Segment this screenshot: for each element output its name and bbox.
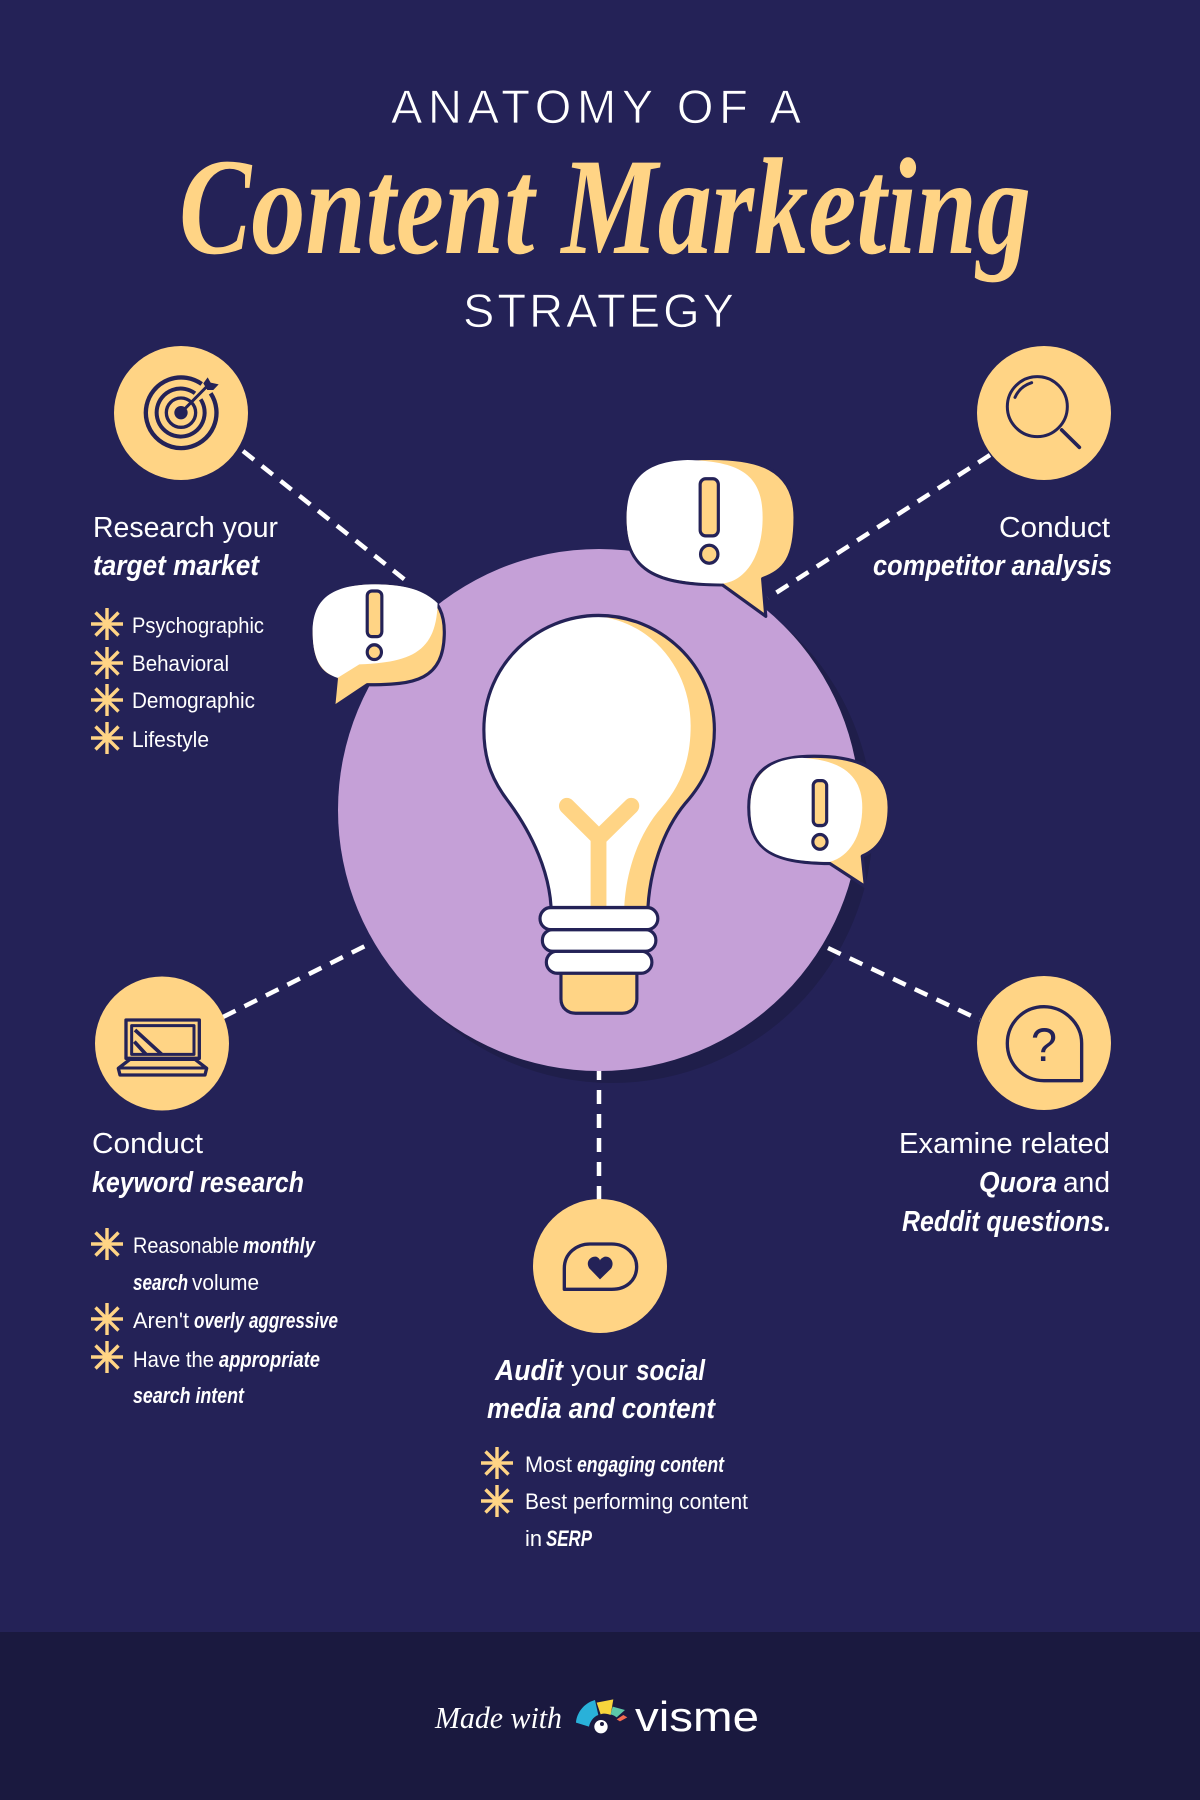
bullet list: search xyxy=(133,1270,188,1295)
heading: target market xyxy=(93,550,260,582)
visme wordmark: visme xyxy=(635,1693,759,1740)
panel: competitor analysis xyxy=(873,346,1112,582)
connector lines xyxy=(223,451,990,1200)
bullet list: search intent xyxy=(133,1383,245,1408)
heading: Audit xyxy=(494,1355,564,1387)
bullet list: in xyxy=(525,1526,542,1551)
heading: social xyxy=(636,1355,706,1387)
bullet list: overly aggressive xyxy=(194,1308,338,1333)
bullet list: Best performing content xyxy=(525,1489,748,1514)
made with text: Made with xyxy=(434,1700,562,1735)
footer band xyxy=(0,1632,1200,1800)
heading: keyword research xyxy=(92,1167,304,1199)
purple circle xyxy=(338,549,860,1071)
bullet list xyxy=(91,1228,338,1408)
panel: keyword research xyxy=(91,976,338,1408)
heading: Examine related xyxy=(899,1128,1110,1160)
bullet list: Demographic xyxy=(132,688,255,713)
bullet list: Have the xyxy=(133,1347,214,1372)
central illustration: light bulb on circle with speech bubbles xyxy=(311,458,889,1071)
panel: audit social media xyxy=(481,1199,748,1551)
bullet list: volume xyxy=(192,1270,259,1295)
bullet list xyxy=(481,1447,748,1551)
heading: your xyxy=(571,1355,628,1387)
heading: Research your xyxy=(93,512,278,544)
bullet list: SERP xyxy=(546,1526,592,1551)
circle shadow xyxy=(351,561,873,1083)
panel: Quora and Reddit questions xyxy=(899,976,1111,1238)
icon: heart bubble xyxy=(533,1199,667,1333)
heading: Conduct xyxy=(999,512,1110,544)
heading: competitor analysis xyxy=(873,550,1112,582)
light bulb xyxy=(484,615,714,1013)
bullet list: engaging content xyxy=(577,1452,725,1477)
heading: Reddit questions. xyxy=(902,1206,1111,1238)
heading: Quora xyxy=(979,1167,1057,1199)
bullet list: Behavioral xyxy=(132,651,229,676)
bullet list: Aren't xyxy=(133,1308,189,1333)
bullet list: Most xyxy=(525,1452,572,1477)
bullet list: Reasonable xyxy=(133,1233,239,1258)
icon: question bubble xyxy=(977,976,1111,1110)
bullet list: Psychographic xyxy=(132,613,264,638)
heading: Conduct xyxy=(92,1128,203,1160)
icon: laptop xyxy=(95,976,229,1110)
bullet list xyxy=(91,608,264,754)
icon: visme logo xyxy=(576,1699,627,1733)
title: ANATOMY OF A xyxy=(391,80,802,133)
title xyxy=(179,80,1031,337)
icon: target xyxy=(114,346,248,480)
bullet list: Lifestyle xyxy=(132,727,209,752)
bullet list: monthly xyxy=(243,1233,316,1258)
speech bubble: top xyxy=(625,458,795,616)
icon: magnifying glass xyxy=(977,346,1111,480)
speech bubble: right xyxy=(749,756,889,887)
heading: media and content xyxy=(487,1393,716,1425)
speech bubble: left xyxy=(311,583,444,707)
title: STRATEGY xyxy=(463,284,734,337)
icon: question bubble: ? xyxy=(1031,1018,1057,1071)
panel: target market xyxy=(91,346,278,754)
bullet list: appropriate xyxy=(219,1347,320,1372)
heading: and xyxy=(1063,1167,1110,1199)
